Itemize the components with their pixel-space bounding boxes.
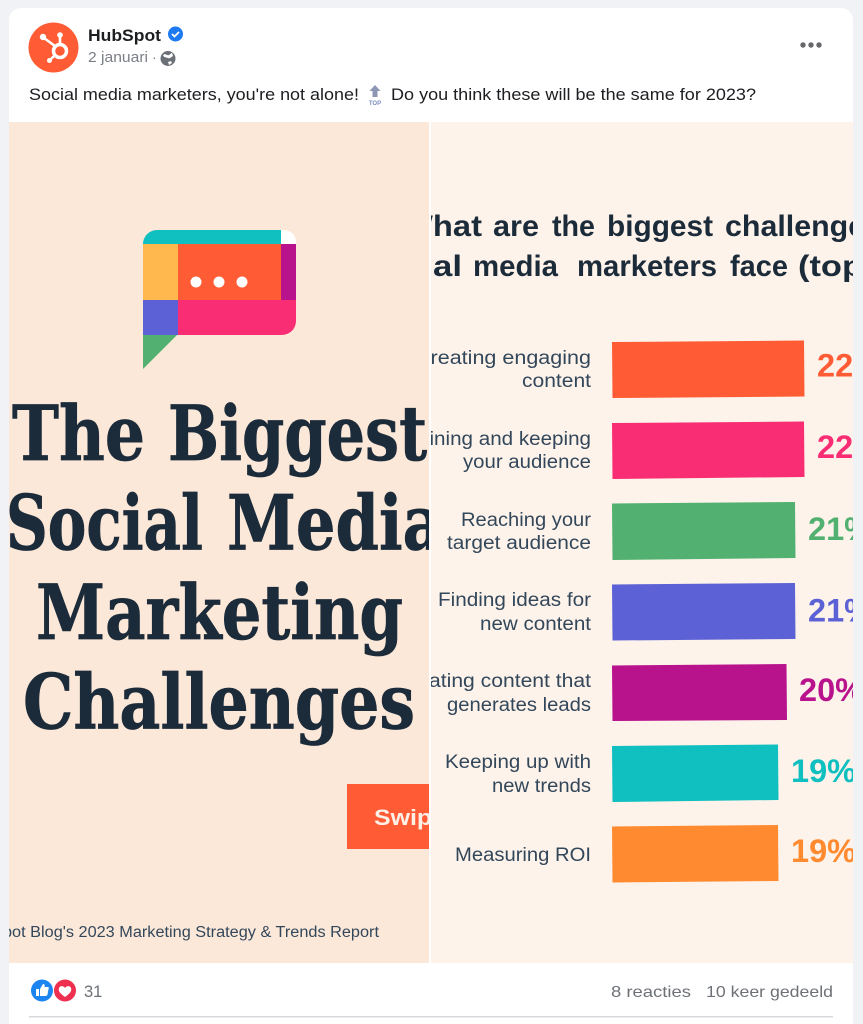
bar row: reaching your target audience: Reaching your bbox=[461, 510, 592, 531]
bar row: finding ideas for new content: new content bbox=[480, 614, 592, 635]
icon: speech bubble bbox=[143, 230, 296, 369]
chart heading: al bbox=[433, 250, 462, 283]
chart heading: media bbox=[473, 250, 558, 283]
bar row: measuring ROI bbox=[455, 825, 856, 882]
reaction count: 31 bbox=[84, 983, 102, 1001]
post header bbox=[28, 22, 822, 72]
panel: title slide bbox=[3, 122, 446, 963]
comment count: 8 reacties bbox=[611, 984, 691, 1001]
chart heading bbox=[431, 214, 853, 282]
icon: love bbox=[54, 980, 76, 1002]
heading: Social bbox=[6, 478, 203, 568]
chart heading: face bbox=[730, 250, 788, 283]
icon: top arrow bbox=[369, 85, 381, 107]
bar row: gaining and keeping your audience bbox=[402, 422, 863, 479]
heading: The bbox=[12, 389, 145, 478]
swipe button: Swipe bbox=[374, 805, 446, 830]
chart heading: biggest bbox=[607, 210, 713, 243]
icon: more menu bbox=[800, 42, 822, 48]
chart heading: marketers bbox=[577, 250, 717, 283]
chart heading: What bbox=[402, 210, 482, 243]
bar row: finding ideas for new content: Finding ideas for bbox=[438, 590, 592, 611]
bar row: finding ideas for new content bbox=[438, 583, 863, 640]
post caption bbox=[29, 85, 756, 107]
bar row: creating engaging content bbox=[415, 340, 863, 398]
post caption: Do you think these will be the same for 2023? bbox=[391, 86, 756, 104]
bar row: reaching your target audience bbox=[447, 502, 863, 560]
panel: bar chart slide bbox=[395, 122, 863, 963]
bar row: reaching your target audience: target audience bbox=[447, 533, 591, 554]
page name: HubSpot bbox=[88, 26, 161, 45]
bar row: creating engaging content: content bbox=[522, 371, 592, 392]
chart heading: (top bbox=[798, 250, 863, 283]
bar row: gaining and keeping your audience: Gaining and keeping bbox=[402, 429, 591, 450]
post header: · bbox=[152, 49, 157, 65]
bar row: measuring ROI: 19% bbox=[791, 833, 856, 869]
heading: Media bbox=[227, 478, 443, 568]
heading bbox=[6, 389, 443, 746]
icon: HubSpot logo bbox=[28, 22, 78, 72]
bar row: creating content that generates leads: 20% bbox=[799, 672, 863, 708]
bar row: keeping up with new trends: Keeping up with bbox=[445, 752, 591, 773]
bar row: creating content that generates leads bbox=[395, 664, 863, 721]
share count: 10 keer gedeeld bbox=[706, 984, 833, 1001]
reactions bar bbox=[31, 980, 833, 1002]
bar row: creating content that generates leads: Creating content that bbox=[395, 671, 592, 692]
chart heading: the bbox=[552, 210, 595, 243]
icon: top arrow: TOP bbox=[369, 101, 381, 107]
icon: verified badge bbox=[168, 26, 183, 42]
icon: globe bbox=[160, 51, 176, 66]
bar row: creating engaging content: Creating engaging bbox=[415, 348, 591, 369]
post date: 2 januari bbox=[88, 50, 148, 66]
bar row: keeping up with new trends: 19% bbox=[791, 753, 856, 789]
heading: Marketing bbox=[36, 568, 403, 657]
icon: like bbox=[31, 980, 53, 1002]
source note: pot Blog's 2023 Marketing Strategy & Trends Report bbox=[3, 924, 380, 941]
swipe button bbox=[347, 784, 429, 849]
bar row: keeping up with new trends bbox=[445, 744, 856, 802]
heading: Challenges bbox=[23, 658, 415, 746]
chart heading: are bbox=[493, 210, 539, 243]
bar row: measuring ROI: Measuring ROI bbox=[455, 845, 591, 866]
bar row: creating content that generates leads: generates leads bbox=[447, 695, 591, 716]
post caption: Social media marketers, you're not alone! bbox=[29, 86, 359, 104]
bar row: keeping up with new trends: new trends bbox=[492, 776, 591, 797]
heading: Biggest bbox=[168, 389, 427, 478]
bar row: gaining and keeping your audience: your audience bbox=[463, 452, 591, 473]
